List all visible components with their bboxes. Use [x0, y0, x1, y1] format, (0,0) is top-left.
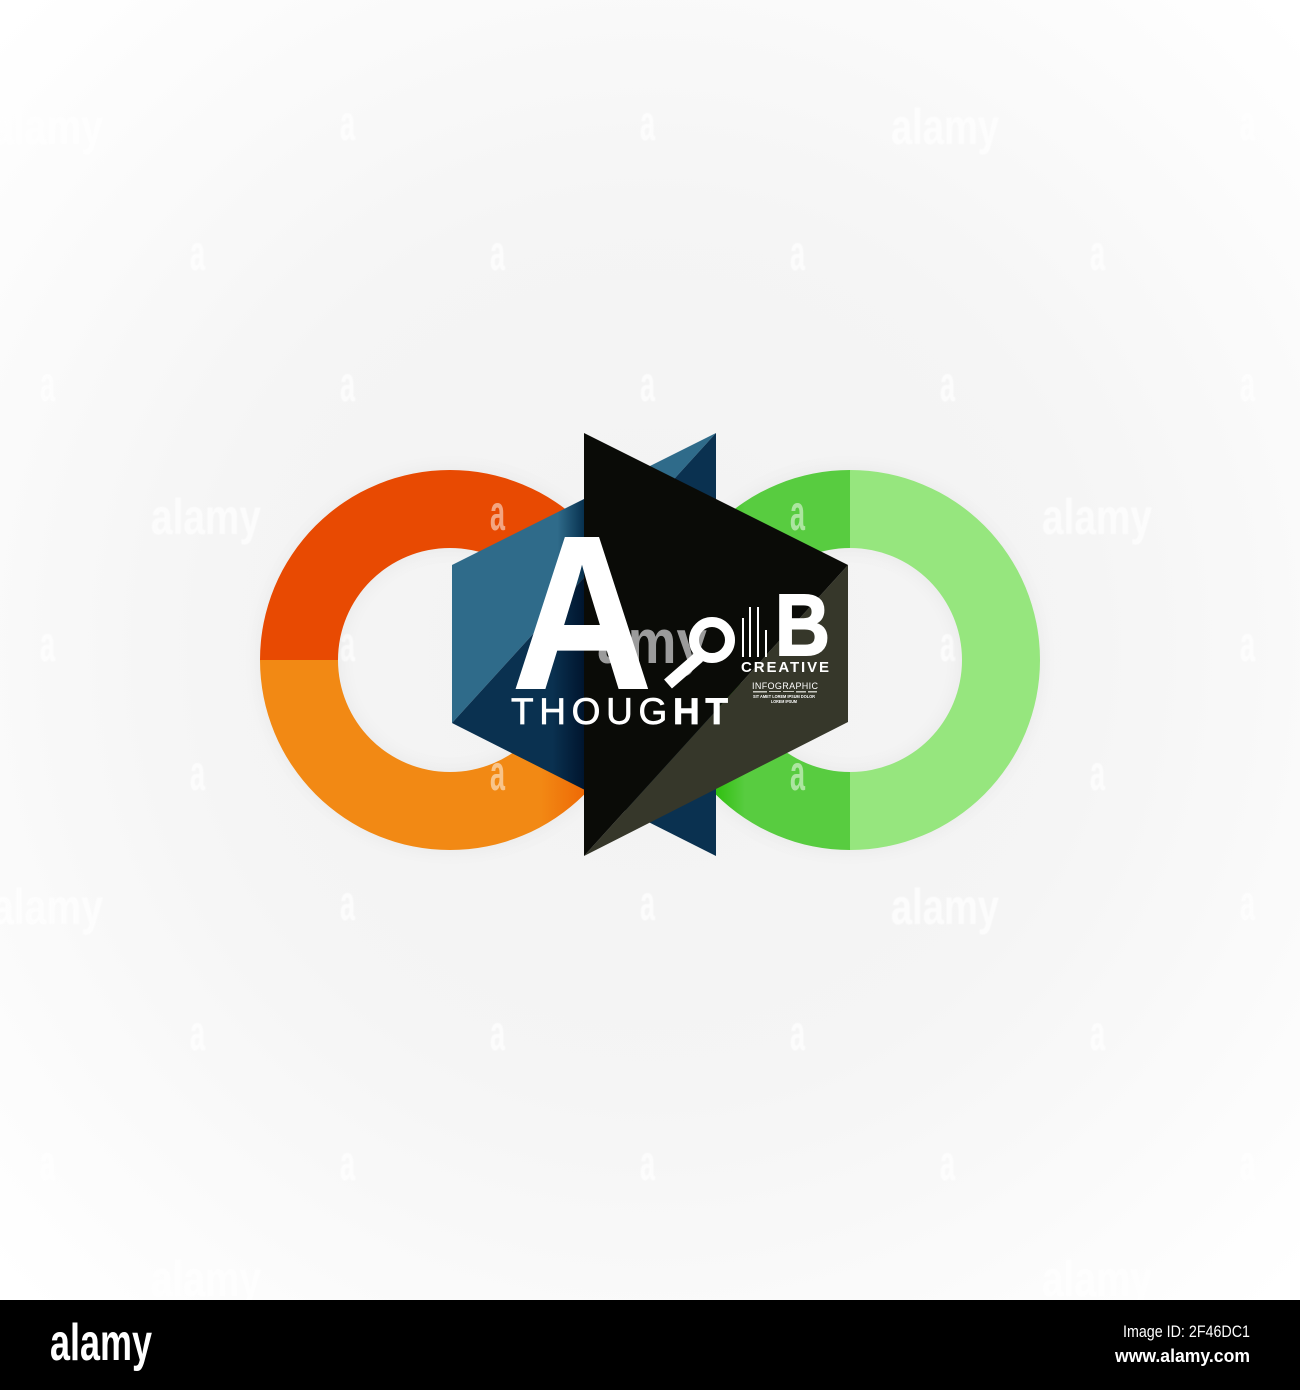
faint background watermarks: a: [490, 1005, 506, 1061]
faint background watermarks: a: [1090, 1005, 1106, 1061]
small caption text: LOREM IPSUM: [771, 699, 797, 704]
footer logo: alamy: [50, 1314, 152, 1372]
faint background watermarks: a: [1240, 95, 1256, 151]
ring segment: orange bottom half: [260, 660, 640, 850]
watermark over the centre: amy: [597, 608, 707, 677]
front triangle: black and olive: [584, 433, 848, 856]
faint background watermarks: a: [1090, 225, 1106, 281]
right ring: [660, 470, 1040, 850]
image id: Image ID: 2F46DC1: [1123, 1322, 1250, 1341]
small caption text: SIT AMET LOREM IPSUM DOLOR: [753, 694, 816, 699]
small divider dashes: [753, 691, 817, 692]
faint background watermarks: a: [640, 95, 656, 151]
faint background watermarks: a: [790, 1005, 806, 1061]
letter A: A: [512, 492, 652, 735]
soft shadow behind shapes: [260, 470, 1040, 850]
faint background watermarks: a: [340, 616, 356, 672]
faint background watermarks: a: [190, 225, 206, 281]
faint background watermarks: alamy: [1042, 1251, 1152, 1307]
black facet: [584, 433, 848, 856]
icon: magnifying glass: [668, 622, 730, 684]
faint background watermarks: a: [940, 616, 956, 672]
faint background watermarks: a: [1090, 745, 1106, 801]
faint background watermarks: a: [790, 225, 806, 281]
left ring: [260, 470, 640, 850]
ring segment: light green right half: [850, 470, 1040, 850]
faint background watermarks: alamy: [891, 879, 999, 935]
faint background watermarks: a: [1240, 616, 1256, 672]
faint background watermarks: a: [190, 745, 206, 801]
faint background watermarks: a: [40, 616, 56, 672]
watermark letters on the rings: a: [790, 745, 806, 801]
faint background watermarks: a: [640, 356, 656, 412]
watermark letters on the rings: a: [490, 745, 506, 801]
icon: small bars: [742, 607, 767, 657]
faint background watermarks: a: [40, 1135, 56, 1191]
navy facet: [452, 433, 716, 856]
faint background watermarks: a: [640, 875, 656, 931]
word INFOGRAPHIC: INFOGRAPHIC: [752, 681, 818, 691]
faint background watermarks: a: [1240, 1135, 1256, 1191]
faint background watermarks: a: [340, 875, 356, 931]
faint background watermarks: a: [940, 1135, 956, 1191]
faint background watermarks: a: [490, 225, 506, 281]
faint background watermarks: a: [340, 95, 356, 151]
watermark letters on the rings: a: [490, 485, 506, 541]
faint background watermarks: alamy: [1042, 489, 1152, 545]
faint background watermarks: alamy: [151, 1251, 261, 1307]
faint background watermarks: a: [190, 1005, 206, 1061]
word THOUGHT: THOUGHT: [511, 691, 728, 732]
ring segment: green left half: [660, 470, 850, 850]
faint background watermarks: a: [340, 356, 356, 412]
faint background watermarks: alamy: [891, 99, 999, 155]
faint background watermarks: a: [40, 356, 56, 412]
word CREATIVE: CREATIVE: [741, 659, 829, 676]
faint background watermarks: a: [940, 356, 956, 412]
faint background watermarks: a: [1240, 356, 1256, 412]
faint background watermarks: a: [640, 1135, 656, 1191]
faint background watermarks: alamy: [151, 489, 261, 545]
teal facet: [452, 433, 716, 723]
letter B: B: [775, 577, 830, 674]
watermark letters on the rings: [490, 485, 806, 801]
back triangle: teal and navy: [452, 433, 716, 856]
ring segment: red-orange top half: [260, 470, 640, 660]
faint background watermarks: a: [340, 1135, 356, 1191]
footer bar: [0, 1300, 1300, 1390]
faint background watermarks: a: [1240, 875, 1256, 931]
olive facet: [584, 565, 848, 856]
watermark letters on the rings: a: [790, 485, 806, 541]
small caption text: [753, 694, 816, 704]
website: www.alamy.com: [1114, 1346, 1250, 1366]
